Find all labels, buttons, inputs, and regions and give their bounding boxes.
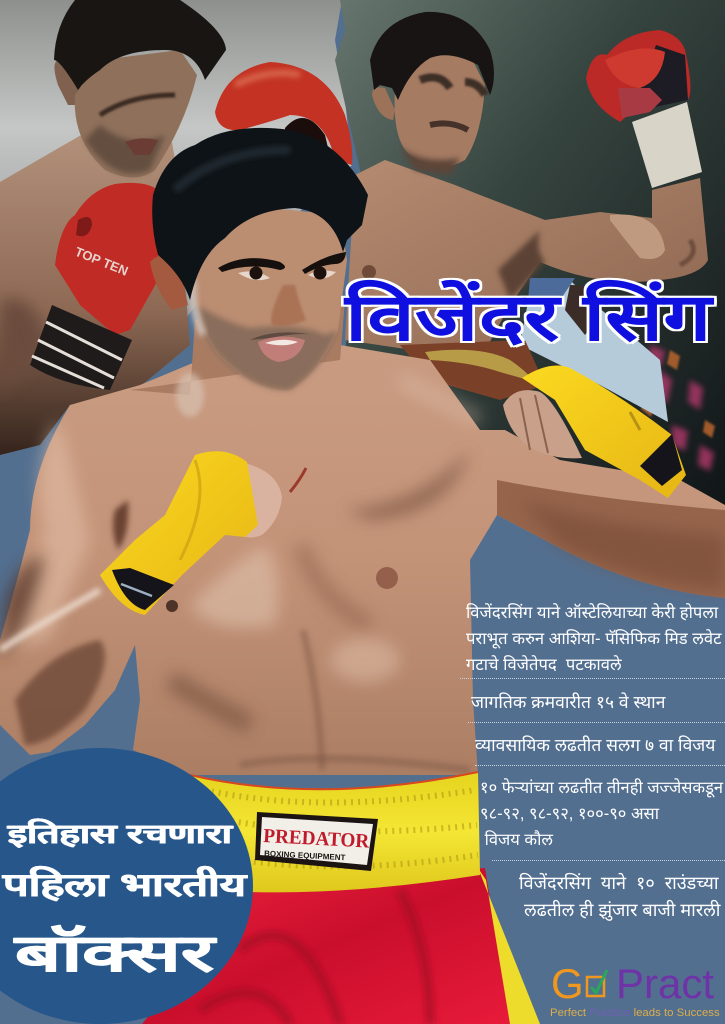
championship belt <box>400 340 545 400</box>
achievement 1: गटाचे विजेतेपद पटकावले <box>466 655 622 674</box>
badge text: बॉक्सर <box>15 925 214 983</box>
front glove <box>55 183 158 335</box>
arm shading <box>5 420 90 650</box>
achievement 4: १० फेऱ्यांच्या लढतीत तीनही जज्जेसकडून <box>480 779 723 797</box>
hair <box>152 128 368 300</box>
ear <box>150 255 188 310</box>
logo tagline: Perfect Practice leads to Success <box>550 1007 720 1019</box>
logo wordmark: Pract <box>616 960 714 1007</box>
achievement 2: जागतिक क्रमवारीत १५ वे स्थान <box>471 692 665 712</box>
logo: GoPract <box>550 960 720 1019</box>
badge circle <box>0 748 253 1024</box>
achievement 3: व्यावसायिक लढतीत सलग ७ वा विजय <box>475 735 715 755</box>
achievement list <box>460 603 725 921</box>
right hand wrap <box>522 366 686 498</box>
torso and arms <box>0 345 725 775</box>
back glove <box>215 62 352 165</box>
achievement 1: पराभूत करुन आशिया- पॅसिफिक मिड लवेट <box>466 629 721 648</box>
achievement 5: लढतील ही झुंजार बाजी मारली <box>524 900 720 920</box>
referee shirt <box>520 280 668 422</box>
achievement 4 <box>480 778 724 849</box>
achievement 1 <box>466 603 722 674</box>
shorts <box>142 868 510 1024</box>
confetti lights <box>649 345 714 471</box>
achievement 4: ९८-९२, ९८-९२, १००-९० असा <box>480 805 659 823</box>
badge text: इतिहास रचणारा <box>8 819 232 849</box>
top-left photo: TOP TEN <box>73 244 130 279</box>
icon: checkbox <box>586 970 608 998</box>
logo letter G: G <box>551 960 584 1007</box>
top-left photo <box>0 0 352 455</box>
predator patch: BOXING EQUIPMENT <box>264 849 346 862</box>
predator patch <box>255 812 378 871</box>
nose and mouth <box>271 285 306 326</box>
left hand <box>240 462 282 538</box>
left hand wrap <box>100 451 258 615</box>
right fist <box>503 390 582 458</box>
raised glove <box>586 30 690 122</box>
waistband <box>190 772 480 892</box>
top-right photo <box>335 0 725 530</box>
achievement 4: विजय कौल <box>485 831 553 849</box>
chest and abs shading <box>345 450 470 520</box>
achievement 5: विजेंदरसिंग याने १० राउंडच्या <box>519 873 718 893</box>
badge text <box>2 818 248 983</box>
head <box>190 205 347 390</box>
eyes and brows <box>218 258 285 272</box>
name title: विजेंदर सिंग <box>345 280 712 354</box>
predator patch: PREDATOR <box>263 825 370 853</box>
neck <box>130 300 345 395</box>
achievement 5 <box>519 872 721 921</box>
achievement 1: विजेंदरसिंग याने ऑस्टेलियाच्या केरी होपला <box>466 603 718 622</box>
badge text: पहिला भारतीय <box>3 866 246 903</box>
